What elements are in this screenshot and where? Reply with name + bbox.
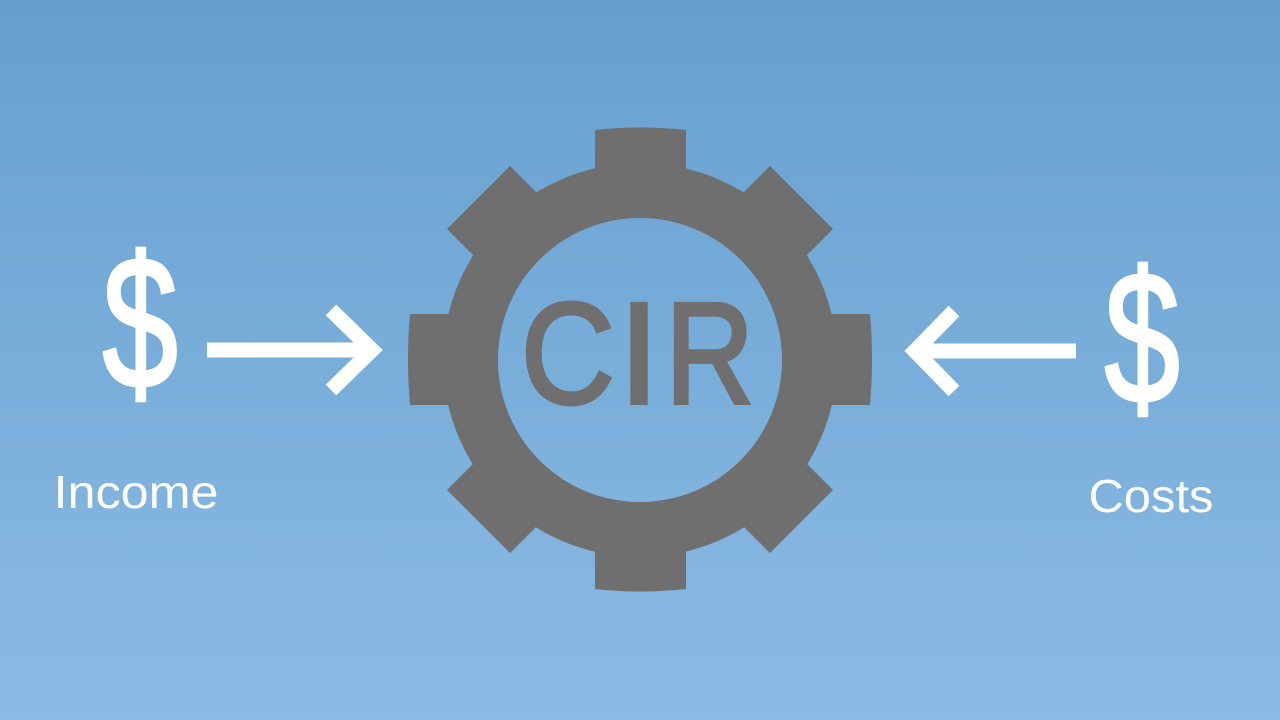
icon: gear (408, 128, 872, 592)
heading: CIR: C (521, 274, 615, 435)
heading: CIR (521, 273, 754, 435)
label: income: Income (54, 466, 218, 518)
icon: costs dollar: $ (1104, 233, 1180, 443)
label: costs: Costs (1088, 470, 1214, 522)
heading: CIR: R (666, 274, 754, 434)
icon: income dollar: $ (102, 218, 178, 428)
arrow: income to gear (207, 310, 372, 390)
arrow: costs to gear (915, 311, 1076, 391)
heading: CIR: I (619, 273, 659, 434)
